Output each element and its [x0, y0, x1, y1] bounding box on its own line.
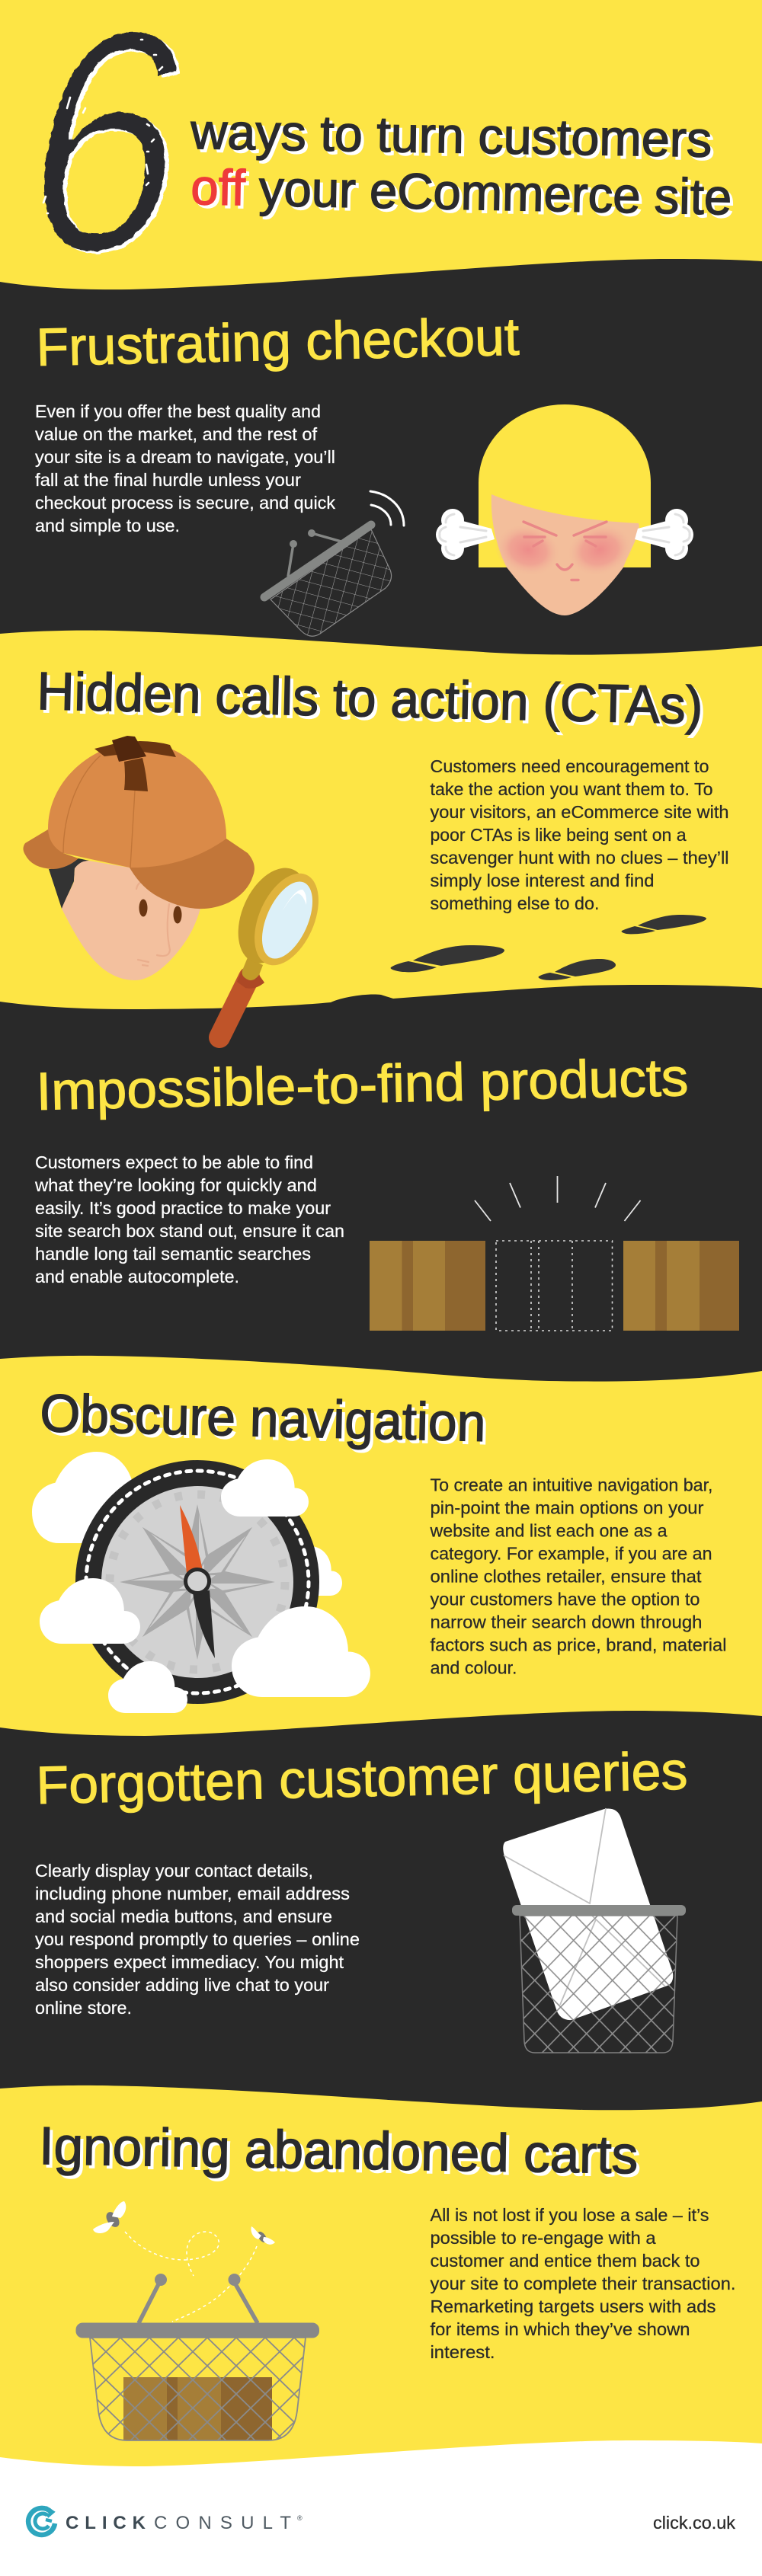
envelope [503, 1808, 673, 2020]
body text: Remarketing targets users with ads [430, 2296, 716, 2316]
body text: and enable autocomplete. [35, 1267, 239, 1286]
heading: Obscure navigation [40, 1383, 486, 1453]
heading: Ignoring abandoned carts [42, 2119, 642, 2188]
body text: your site is a dream to navigate, you’ll [35, 447, 335, 467]
body text: what they’re looking for quickly and [34, 1175, 317, 1195]
body text: your visitors, an eCommerce site with [430, 802, 728, 822]
body text: online store. [35, 1998, 132, 2018]
heading: Hidden calls to action (CTAs) [37, 661, 703, 735]
dashed missing box [496, 1241, 613, 1331]
body text [430, 2205, 736, 2362]
body text: also consider adding live chat to your [35, 1975, 329, 1995]
heading: Obscure navigation [43, 1386, 489, 1456]
body text: simply lose interest and find [430, 871, 654, 890]
body text: scavenger hunt with no clues – they’ll [430, 848, 728, 868]
panel: frustrating checkout [35, 307, 693, 636]
right box [623, 1241, 739, 1331]
compass star [120, 1504, 275, 1660]
highlight rays [475, 1176, 640, 1221]
title line two: off your eCommerce site [190, 158, 732, 225]
body text: Clearly display your contact details, [35, 1861, 313, 1881]
basket rim [512, 1905, 686, 1916]
basket handles [139, 2274, 258, 2323]
body text: online clothes retailer, ensure that [430, 1566, 702, 1586]
registered mark: ® [297, 2514, 303, 2522]
cardboard box [123, 2377, 272, 2440]
body text: factors such as price, brand, material [430, 1635, 727, 1654]
band: dark section three [0, 985, 762, 1382]
panel: ignoring abandoned carts [39, 2116, 735, 2440]
body text: your customers have the option to [430, 1589, 700, 1609]
cloud [108, 1661, 187, 1713]
body text: easily. It’s good practice to make your [35, 1198, 331, 1218]
heading: Hidden calls to action (CTAs) [40, 664, 706, 738]
body text: Customers need encouragement to [430, 756, 709, 776]
body text: checkout process is secure, and quick [35, 493, 335, 513]
title line one: ways to turn customers [190, 103, 712, 168]
footer [28, 2507, 735, 2535]
dashed fly trails [125, 2232, 257, 2322]
body text: To create an intuitive navigation bar, [430, 1475, 713, 1494]
body text: shoppers expect immediacy. You might [35, 1952, 344, 1972]
title line two: off your eCommerce site [194, 161, 735, 229]
band: dark section one [0, 259, 762, 655]
panel: forgotten customer queries [35, 1741, 688, 2053]
logo wordmark: CLICK [66, 2513, 146, 2533]
illustration: compass in clouds [32, 1452, 370, 1713]
body text [35, 1861, 360, 2018]
body text: poor CTAs is like being sent on a [430, 825, 687, 845]
body text: take the action you want them to. To [430, 779, 713, 799]
body text: handle long tail semantic searches [35, 1244, 311, 1264]
basket mesh [90, 2338, 306, 2440]
band: white footer [0, 2440, 762, 2576]
basket rim [76, 2323, 319, 2338]
website address: click.co.uk [653, 2513, 735, 2533]
compass dial [75, 1460, 319, 1704]
body text: and colour. [430, 1657, 517, 1677]
icon: footprint [391, 945, 504, 972]
icon: footprint [622, 915, 706, 934]
basket mesh [520, 1916, 677, 2053]
logo wordmark light: CONSULT [154, 2513, 291, 2533]
body text: value on the market, and the rest of [35, 424, 317, 444]
heading: Forgotten customer queries [36, 1741, 688, 1815]
illustration: envelope in wastebasket [503, 1808, 686, 2053]
cloud [40, 1578, 140, 1644]
title line one: ways to turn customers [193, 106, 716, 171]
body text: All is not lost if you lose a sale – it’s [430, 2205, 709, 2225]
body text: including phone number, email address [35, 1884, 350, 1903]
cloud [32, 1452, 154, 1543]
body text: and social media buttons, and ensure [35, 1906, 332, 1926]
body text: narrow their search down through [430, 1612, 703, 1632]
body text: interest. [430, 2342, 495, 2362]
body text: possible to re-engage with a [430, 2228, 656, 2248]
body text: Customers expect to be able to find [35, 1152, 313, 1172]
illustration: basket with box and flies [76, 2201, 319, 2440]
body text: and simple to use. [35, 516, 180, 535]
body text: fall at the final hurdle unless your [35, 470, 301, 490]
body text: Even if you offer the best quality and [35, 401, 321, 421]
body text: for items in which they’ve shown [430, 2319, 690, 2339]
heading: Impossible-to-find products [36, 1047, 689, 1121]
body text: customer and entice them back to [430, 2251, 700, 2271]
panel: hidden calls to action [23, 661, 728, 1037]
body text: website and list each one as a [430, 1520, 668, 1540]
left box [370, 1241, 485, 1331]
heading: Frustrating checkout [36, 307, 520, 377]
band: dark section five [0, 1711, 762, 2110]
heading: Ignoring abandoned carts [39, 2116, 639, 2184]
body text [430, 756, 728, 913]
panel: obscure navigation [32, 1383, 727, 1713]
body text [430, 1475, 727, 1677]
body text: pin-point the main options on your [430, 1497, 704, 1517]
icon: tipped shopping basket [264, 491, 404, 636]
body text: you respond promptly to queries – online [35, 1929, 360, 1949]
logo: click consult [28, 2507, 303, 2535]
title [2, 0, 735, 320]
body text [35, 401, 335, 535]
body text [34, 1152, 344, 1286]
icon: footprint [539, 959, 616, 980]
body text: your site to complete their transaction. [430, 2274, 736, 2293]
cloud [232, 1606, 370, 1697]
illustration: boxes with missing box [370, 1176, 739, 1331]
fly [251, 2226, 275, 2245]
body text: something else to do. [430, 893, 599, 913]
panel: impossible-to-find products [34, 1047, 739, 1331]
body text: category. For example, if you are an [430, 1543, 712, 1563]
cloud [274, 1546, 342, 1596]
fly [93, 2201, 126, 2233]
icon: angry face with steam [436, 404, 693, 615]
body text: site search box stand out, ensure it can [35, 1221, 344, 1241]
cloud [221, 1459, 309, 1517]
logo icon [28, 2507, 55, 2535]
illustration: detective with magnifying glass [23, 736, 331, 1037]
compass needle [180, 1505, 215, 1658]
